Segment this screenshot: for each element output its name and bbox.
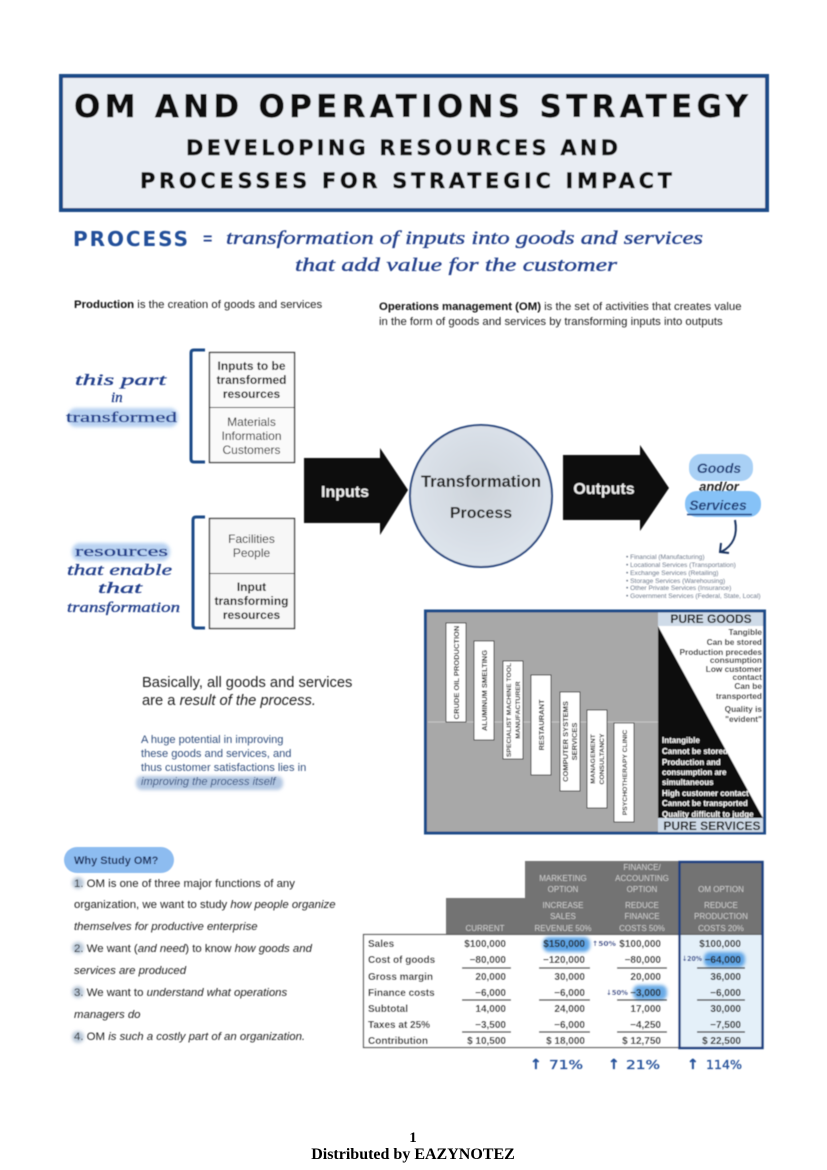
column: finance option: $ 12,750 — [622, 1036, 661, 1047]
continuum bar: management consultancy — [587, 710, 607, 808]
handwritten percentage increases: 21% — [626, 1058, 660, 1072]
goods characteristics: contact — [732, 672, 762, 682]
column: OM option: −6,000 — [710, 988, 741, 999]
box: transforming resources: Facilities — [228, 532, 275, 546]
note: improving the process — [136, 734, 306, 790]
column: OM option: $100,000 — [699, 939, 741, 950]
pure goods header: PURE GOODS — [670, 612, 752, 626]
row labels — [368, 939, 436, 1047]
goods and services triangles — [658, 626, 763, 818]
column: current: 14,000 — [475, 1004, 506, 1015]
box: transformed resources: Inputs to be — [218, 359, 286, 373]
services characteristics: simultaneous — [662, 778, 714, 787]
continuum bar: management consultancy: MANAGEMENT — [590, 733, 597, 784]
handwritten process definition — [73, 227, 703, 276]
column: marketing option: 30,000 — [554, 972, 585, 983]
list of service types — [626, 554, 761, 600]
circle: transformation process — [410, 425, 552, 567]
goods and services output: Goods — [697, 460, 741, 476]
table headers: SALES — [550, 912, 576, 921]
handwritten change annotations: ↓20% — [682, 954, 702, 963]
column: finance option: 17,000 — [630, 1004, 661, 1015]
continuum bar: crude oil production — [446, 623, 466, 722]
column: OM option: −64,000 — [705, 955, 741, 966]
table headers: OPTION — [627, 885, 658, 894]
callout: result of the process: Basically, all goods and services — [142, 675, 352, 691]
handwritten note: enabling resources: resources — [75, 544, 168, 560]
row labels: Sales — [368, 939, 395, 950]
list of service types: • Other Private Services (Insurance) — [626, 585, 731, 592]
circle: transformation process: Transformation — [421, 473, 541, 491]
handwritten percentage increases: 114% — [706, 1058, 742, 1072]
services characteristics: Cannot be transported — [662, 799, 748, 808]
arrow: outputs — [563, 445, 669, 531]
bracket: inputs to be transformed — [191, 350, 205, 462]
goods and services output — [685, 454, 761, 517]
column: marketing option — [543, 939, 585, 1047]
services characteristics: Production and — [662, 758, 721, 767]
callout: result of the process: are a result of the process. — [142, 693, 316, 709]
column: OM option: 30,000 — [710, 1004, 741, 1015]
heading: why study OM — [64, 847, 174, 873]
table headers: INCREASE — [543, 901, 583, 910]
list of service types: • Exchange Services (Retailing) — [626, 570, 718, 577]
subtitle line one: DEVELOPING RESOURCES AND — [186, 136, 618, 160]
continuum bar: restaurant: RESTAURANT — [537, 699, 546, 751]
services characteristics: Quality difficult to judge — [662, 810, 754, 819]
continuum bar: machine tool manufacturer: MANUFACTURER — [515, 681, 522, 739]
table headers: PRODUCTION — [694, 912, 748, 921]
continuum bar: crude oil production: CRUDE OIL PRODUCTION — [452, 626, 461, 719]
handwritten percentage increases — [530, 1057, 742, 1073]
table headers: REVENUE 50% — [535, 924, 591, 933]
table headers: REDUCE — [625, 901, 659, 910]
continuum bar: computer systems services: SERVICES — [570, 723, 579, 760]
list of service types: • Locational Services (Transportation) — [626, 562, 736, 569]
handwritten note: transformed part — [66, 372, 178, 427]
goods characteristics: Quality is — [725, 704, 762, 714]
panel: goods to services continuum — [426, 611, 764, 833]
handwritten note: enabling resources — [67, 543, 180, 616]
handwritten change annotations: ↓50% — [606, 988, 628, 997]
column: finance option: $100,000 — [619, 939, 661, 950]
note: improving the process: improving the process itself — [141, 776, 277, 788]
table headers: COSTS 50% — [619, 924, 665, 933]
handwritten process definition: PROCESS — [73, 227, 188, 251]
handwritten process definition: transformation of inputs into goods and services — [226, 228, 703, 249]
subtotal rules — [462, 968, 745, 1032]
column: marketing option: −6,000 — [554, 988, 585, 999]
continuum bar: psychotherapy clinic — [614, 723, 634, 822]
continuum bar: management consultancy: CONSULTANCY — [599, 733, 606, 785]
column: current: $100,000 — [464, 939, 506, 950]
goods characteristics: Low customer — [706, 664, 763, 674]
production definition: Production is the creation of goods and services — [74, 299, 322, 311]
goods characteristics: Can be stored — [707, 637, 762, 647]
column: marketing option: −6,000 — [554, 1020, 585, 1031]
note: improving the process: thus customer satisfactions lies in — [141, 762, 306, 774]
box: transforming resources: transforming — [214, 594, 289, 608]
continuum bar: aluminum smelting — [474, 641, 494, 740]
handwritten note: transformed part: transformed — [66, 410, 178, 426]
goods characteristics: "evident" — [725, 714, 762, 724]
column: marketing option: $ 18,000 — [546, 1036, 585, 1047]
column: current: −3,500 — [475, 1020, 506, 1031]
table headers: COSTS 20% — [698, 924, 744, 933]
goods characteristics: transported — [716, 691, 762, 701]
footer: 1 — [409, 1130, 417, 1146]
OM option highlight frame — [680, 862, 762, 1048]
box: transforming resources: Input — [237, 580, 266, 594]
continuum bar: restaurant — [531, 675, 551, 775]
row labels: Contribution — [368, 1036, 428, 1047]
row labels: Finance costs — [368, 988, 435, 999]
table headers: OM OPTION — [698, 885, 744, 894]
handwritten percentage increases: 71% — [549, 1058, 583, 1072]
table headers: REDUCE — [704, 901, 738, 910]
list: reasons to study OM: managers do — [74, 1009, 140, 1021]
bracket: transforming resources — [193, 517, 205, 628]
row labels: Gross margin — [368, 972, 433, 983]
goods characteristics — [679, 627, 763, 724]
handwritten process definition: that add value for the customer — [295, 255, 618, 276]
pure services header: PURE SERVICES — [663, 819, 761, 833]
row labels: Subtotal — [368, 1004, 408, 1015]
goods and services output: and/or — [699, 479, 740, 494]
box: transformed resources: Materials — [227, 415, 276, 429]
continuum bar: computer systems services — [560, 692, 580, 791]
handwritten note: transformed part: in — [111, 390, 123, 406]
goods characteristics: Production precedes — [679, 647, 762, 657]
handwritten percentage increases: ↑ — [530, 1057, 542, 1073]
row labels: Taxes at 25% — [368, 1020, 430, 1031]
list of service types: • Government Services (Federal, State, Local) — [626, 593, 761, 600]
column: marketing option: $150,000 — [543, 939, 585, 950]
handwritten note: enabling resources: transformation — [67, 600, 180, 616]
column: finance option: −80,000 — [625, 955, 661, 966]
arrow: inputs — [304, 448, 408, 535]
services characteristics: Intangible — [662, 736, 700, 745]
column: OM option: $ 22,500 — [702, 1036, 741, 1047]
box: transformed resources: transformed — [216, 373, 287, 387]
operations management definition: in the form of goods and services by transforming inputs into outputs — [379, 316, 723, 328]
icon: curved arrow to list — [720, 520, 736, 553]
list of service types: • Financial (Manufacturing) — [626, 554, 705, 561]
table headers: FINANCE/ — [623, 863, 661, 872]
goods and services output: Services — [689, 497, 747, 513]
continuum bar: psychotherapy clinic: PSYCHOTHERAPY CLINIC — [622, 730, 629, 815]
highlights — [543, 937, 745, 1000]
handwritten change annotations: ↑50% — [592, 939, 616, 948]
column: OM option: 36,000 — [710, 972, 741, 983]
column: marketing option: −120,000 — [543, 955, 585, 966]
column: current: −6,000 — [475, 988, 506, 999]
list: reasons to study OM: 1. OM is one of three major functions of any — [74, 878, 295, 890]
column: finance option: −4,250 — [630, 1020, 661, 1031]
note: improving the process: A huge potential in improving — [141, 734, 283, 746]
list of service types: • Storage Services (Warehousing) — [626, 578, 725, 585]
list: reasons to study OM: 3. We want to understand what operations — [74, 987, 287, 999]
table headers: OPTION — [548, 885, 579, 894]
handwritten process definition: = — [203, 231, 212, 248]
continuum bar: computer systems services: COMPUTER SYSTEMS — [561, 701, 570, 782]
table headers: FINANCE — [624, 912, 660, 921]
footer: Distributed by EAZYNOTEZ — [311, 1146, 515, 1163]
continuum bar: aluminum smelting: ALUMINUM SMELTING — [480, 650, 489, 731]
main title: OM AND OPERATIONS STRATEGY — [74, 89, 749, 125]
title banner — [61, 76, 767, 210]
column: finance option — [619, 939, 661, 1047]
table headers: ACCOUNTING — [615, 874, 669, 883]
column: current — [464, 939, 506, 1047]
goods characteristics: Tangible — [728, 627, 762, 637]
column: current: 20,000 — [475, 972, 506, 983]
handwritten note: transformed part: this part — [75, 372, 167, 389]
goods characteristics: consumption — [710, 655, 762, 665]
list: reasons to study OM: 4. OM is such a costly part of an organization. — [74, 1031, 305, 1043]
column: OM option — [699, 939, 741, 1047]
table: options for increasing contribution — [364, 861, 763, 1048]
footer — [311, 1130, 515, 1163]
box: transformed resources: resources — [223, 387, 281, 401]
list: reasons to study OM: organization, we want to study how people organize — [74, 899, 336, 911]
arrow: inputs: Inputs — [321, 484, 369, 501]
services characteristics — [662, 736, 754, 819]
services characteristics: High customer contact — [662, 789, 749, 798]
handwritten note: enabling resources: that — [98, 580, 143, 597]
row labels: Cost of goods — [368, 955, 436, 966]
box: transformed resources — [209, 352, 294, 462]
continuum bar: machine tool manufacturer: SPECIALIST MACHINE TOOL — [506, 663, 513, 757]
table headers: MARKETING — [539, 874, 587, 883]
goods characteristics: Can be — [734, 681, 762, 691]
table body — [364, 934, 762, 1048]
handwritten note: enabling resources: that enable — [67, 562, 172, 579]
handwritten percentage increases: ↑ — [608, 1057, 620, 1073]
box: transforming resources: People — [233, 546, 271, 560]
operations management definition: Operations management (OM) is the set of activities that creates value — [379, 301, 742, 313]
list: reasons to study OM: 2. We want (and need) to know how goods and — [74, 943, 313, 955]
box: transformed resources: Information — [221, 429, 282, 443]
column: finance option: 20,000 — [630, 972, 661, 983]
services characteristics: Cannot be stored — [662, 747, 728, 756]
list: reasons to study OM — [72, 877, 336, 1043]
continuum bar: machine tool manufacturer — [503, 661, 523, 759]
heading: why study OM: Why Study OM? — [74, 855, 159, 867]
box: transforming resources — [209, 518, 294, 628]
column: marketing option: 24,000 — [554, 1004, 585, 1015]
table headers: CURRENT — [465, 924, 505, 933]
list: reasons to study OM: services are produced — [74, 965, 187, 977]
handwritten percentage increases: ↑ — [687, 1057, 699, 1073]
services characteristics: consumption are — [662, 768, 727, 777]
subtitle line two: PROCESSES FOR STRATEGIC IMPACT — [140, 169, 673, 193]
arrow: outputs: Outputs — [573, 481, 635, 498]
column: OM option: −7,500 — [710, 1020, 741, 1031]
box: transforming resources: resources — [223, 608, 281, 622]
box: transformed resources: Customers — [222, 443, 281, 457]
handwritten change annotations — [592, 939, 702, 997]
column: current: $ 10,500 — [467, 1036, 506, 1047]
circle: transformation process: Process — [450, 505, 512, 522]
note: improving the process: these goods and services, and — [141, 748, 291, 760]
table headers — [446, 861, 763, 934]
column: finance option: −3,000 — [630, 988, 661, 999]
list: reasons to study OM: themselves for productive enterprise — [74, 921, 258, 933]
column: current: −80,000 — [470, 955, 506, 966]
